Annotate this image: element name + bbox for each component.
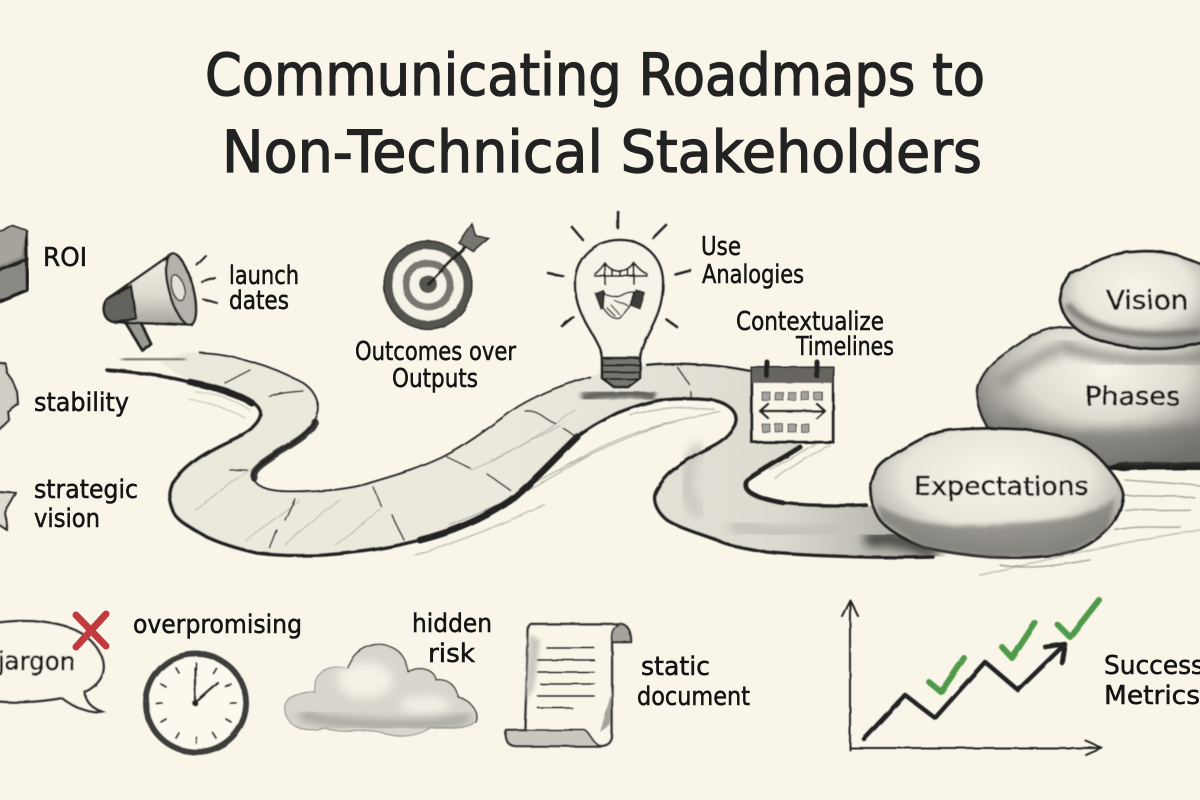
icon: briefcase <box>0 226 27 303</box>
check marks <box>929 600 1099 692</box>
icon: scroll <box>506 624 631 746</box>
label: launch dates: launch <box>229 261 299 291</box>
label: overpromising: overpromising <box>133 610 302 640</box>
icon: speech bubble <box>0 621 104 712</box>
label: contextualize timelines: Timelines <box>795 332 894 362</box>
label: static document <box>637 652 750 712</box>
label: outcomes over outputs <box>355 337 516 394</box>
road edges <box>200 353 590 492</box>
trend line <box>864 644 1065 739</box>
rays <box>548 212 690 327</box>
label: outcomes over outputs: Outcomes over <box>355 337 516 367</box>
label: success metrics <box>1104 651 1200 711</box>
icon: megaphone <box>104 250 217 351</box>
label: ROI: ROI <box>43 243 87 273</box>
icon: target with arrow <box>384 224 488 329</box>
rock: phases <box>977 327 1200 470</box>
label: phases: Phases <box>1085 382 1180 412</box>
icon: star <box>0 492 16 530</box>
bridge <box>595 263 647 284</box>
road dashes <box>225 367 691 548</box>
label: static document: static <box>641 652 710 682</box>
label: jargon: jargon <box>0 647 75 677</box>
label: vision: Vision <box>1106 286 1188 316</box>
label: use analogies <box>701 232 804 290</box>
icon: calendar <box>752 362 833 442</box>
road surface <box>160 353 933 557</box>
winding road <box>107 353 1200 575</box>
pencil shading <box>122 358 185 360</box>
label: strategic vision: vision <box>34 504 100 534</box>
rock: vision <box>1060 251 1200 349</box>
chart: success metrics <box>842 600 1102 755</box>
title: Communicating Roadmaps to <box>205 41 985 109</box>
handshake <box>595 290 645 319</box>
label: stability: stability <box>34 388 129 418</box>
label: static document: document <box>637 682 750 712</box>
icon: light bulb <box>548 212 690 387</box>
icon: cloud <box>285 644 477 736</box>
title <box>205 41 985 186</box>
label: hidden risk <box>412 609 492 669</box>
label: strategic vision <box>34 475 138 534</box>
label: hidden risk: risk <box>428 639 475 669</box>
icon: red cross <box>76 614 106 647</box>
icon: clock <box>146 654 246 752</box>
label: strategic vision: strategic <box>34 475 138 505</box>
label: use analogies: Analogies <box>702 260 804 290</box>
label: contextualize timelines: Contextualize <box>736 307 884 337</box>
label: launch dates <box>229 261 299 316</box>
label: use analogies: Use <box>701 232 741 262</box>
title: Non-Technical Stakeholders <box>222 118 982 186</box>
label: success metrics: Metrics <box>1104 681 1200 711</box>
label: expectations: Expectations <box>914 472 1089 502</box>
rock: expectations <box>870 428 1200 567</box>
label: hidden risk: hidden <box>412 609 492 639</box>
label: launch dates: dates <box>229 286 289 316</box>
label: outcomes over outputs: Outputs <box>392 364 478 394</box>
icon: gear <box>0 362 18 433</box>
axes <box>842 600 1102 755</box>
label: contextualize timelines <box>736 307 894 362</box>
